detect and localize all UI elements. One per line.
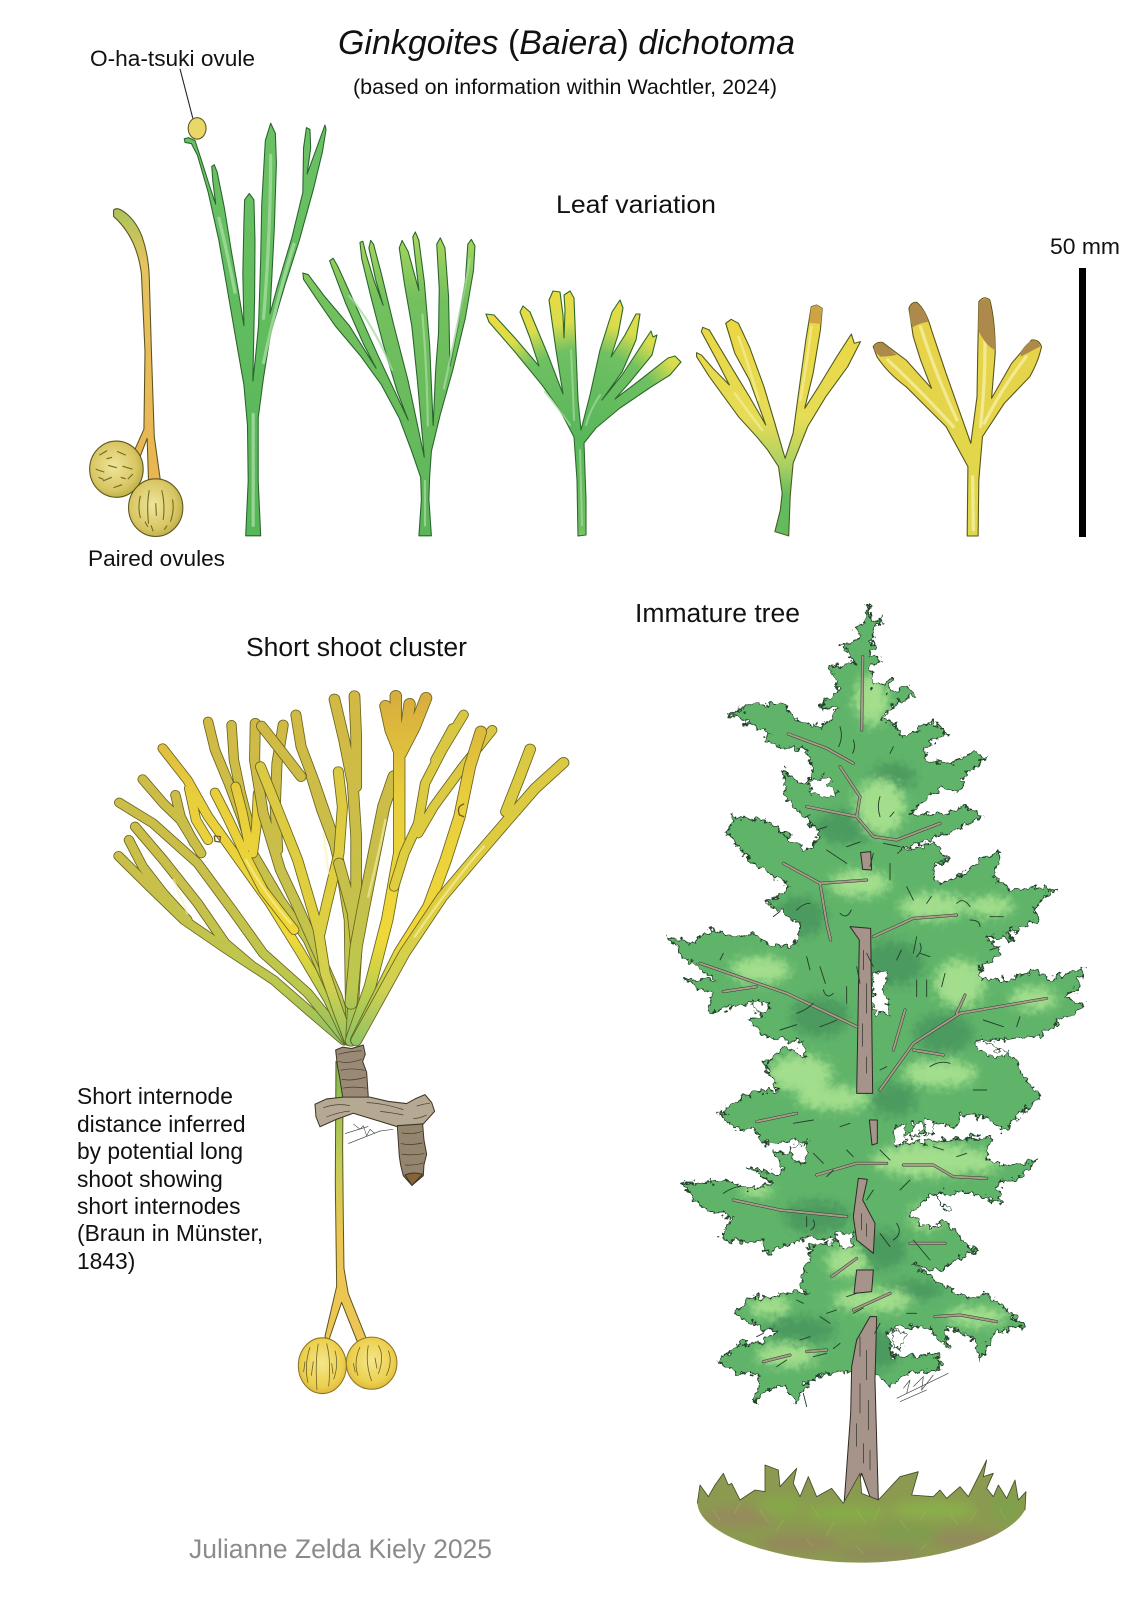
stump tip — [405, 1173, 423, 1185]
grass mound — [697, 1460, 1026, 1563]
text block: internode note — [77, 1083, 263, 1274]
title: Ginkgoites (Baiera) dichotoma — [338, 24, 795, 62]
credit: Julianne Zelda Kiely 2025 — [189, 1534, 492, 1564]
text block: internode note: short internodes — [77, 1193, 240, 1219]
ovule right — [129, 479, 183, 536]
ovule stalk — [114, 209, 161, 483]
branches — [700, 657, 1047, 1362]
label: scale 50 mm: 50 mm — [1050, 234, 1120, 259]
text block: internode note: by potential long — [77, 1138, 243, 1164]
grass blade strokes — [713, 1503, 1006, 1553]
long stalk — [325, 1061, 368, 1344]
trunk segments — [844, 852, 878, 1505]
grass colour patches — [703, 1493, 1023, 1561]
dark foliage shading — [763, 763, 973, 1370]
label: o-ha-tsuki ovule: O-ha-tsuki ovule — [90, 46, 255, 71]
heading: immature tree: Immature tree — [635, 600, 800, 628]
upper bark stump — [336, 1045, 368, 1101]
leaf fan: left leaves — [119, 715, 351, 1041]
figure: o-ha-tsuki ovule pointer and ovule — [180, 69, 206, 139]
small ovule — [188, 118, 206, 139]
bark texture — [323, 1051, 430, 1165]
leaf 2 — [303, 232, 475, 536]
text block: internode note: 1843) — [77, 1248, 135, 1274]
figure: paired ovules on stalk — [90, 209, 183, 537]
text block: internode note: Short internode — [77, 1083, 233, 1109]
heading: leaf variation: Leaf variation — [556, 191, 716, 219]
trunk bark lines — [857, 950, 870, 1470]
ovule right — [346, 1337, 397, 1389]
branch — [315, 1095, 435, 1127]
leaf 4 highlights — [735, 327, 811, 430]
leaf 5 — [873, 298, 1041, 536]
leaf 4 brown tip — [809, 305, 822, 324]
leaf 3 — [486, 291, 681, 536]
text block: internode note: shoot showing — [77, 1166, 223, 1192]
text block: internode note: (Braun in Münster, — [77, 1220, 263, 1246]
artist signature — [345, 1124, 393, 1144]
lower bark stump — [397, 1124, 427, 1185]
foliage ink marks — [720, 727, 1020, 1407]
leaf 1 highlights — [219, 155, 294, 525]
ovule left — [90, 441, 143, 497]
leaf 5 highlights — [888, 313, 1026, 530]
leaf 3 highlights — [545, 350, 600, 525]
pointer line — [180, 69, 193, 118]
ovule left — [298, 1338, 346, 1394]
tree foliage — [668, 605, 1085, 1403]
figure: short shoot cluster — [119, 696, 564, 1041]
leaf 1 — [184, 123, 326, 536]
label: paired ovules: Paired ovules — [88, 546, 225, 571]
leaf 2 highlights — [349, 259, 470, 525]
figure: twig with ovules — [298, 1045, 435, 1394]
light foliage washes — [730, 675, 1057, 1367]
heading: short shoot cluster: Short shoot cluster — [246, 634, 468, 662]
leaf 5 brown tips — [874, 299, 1040, 357]
subtitle: (based on information within Wachtler, 2024) — [353, 76, 777, 99]
figure: immature tree — [668, 605, 1085, 1505]
leaf 4 — [697, 305, 860, 536]
text block: internode note: distance inferred — [77, 1111, 246, 1137]
scale bar — [1079, 268, 1086, 537]
leaf fan highlights and damage marks — [174, 804, 484, 937]
leaf fan: central and right leaves — [334, 696, 564, 1041]
foliage gaps — [753, 777, 1010, 1350]
artist signature — [897, 1373, 948, 1402]
foliage outline — [668, 605, 1085, 1403]
grass top edge — [697, 1460, 1026, 1510]
